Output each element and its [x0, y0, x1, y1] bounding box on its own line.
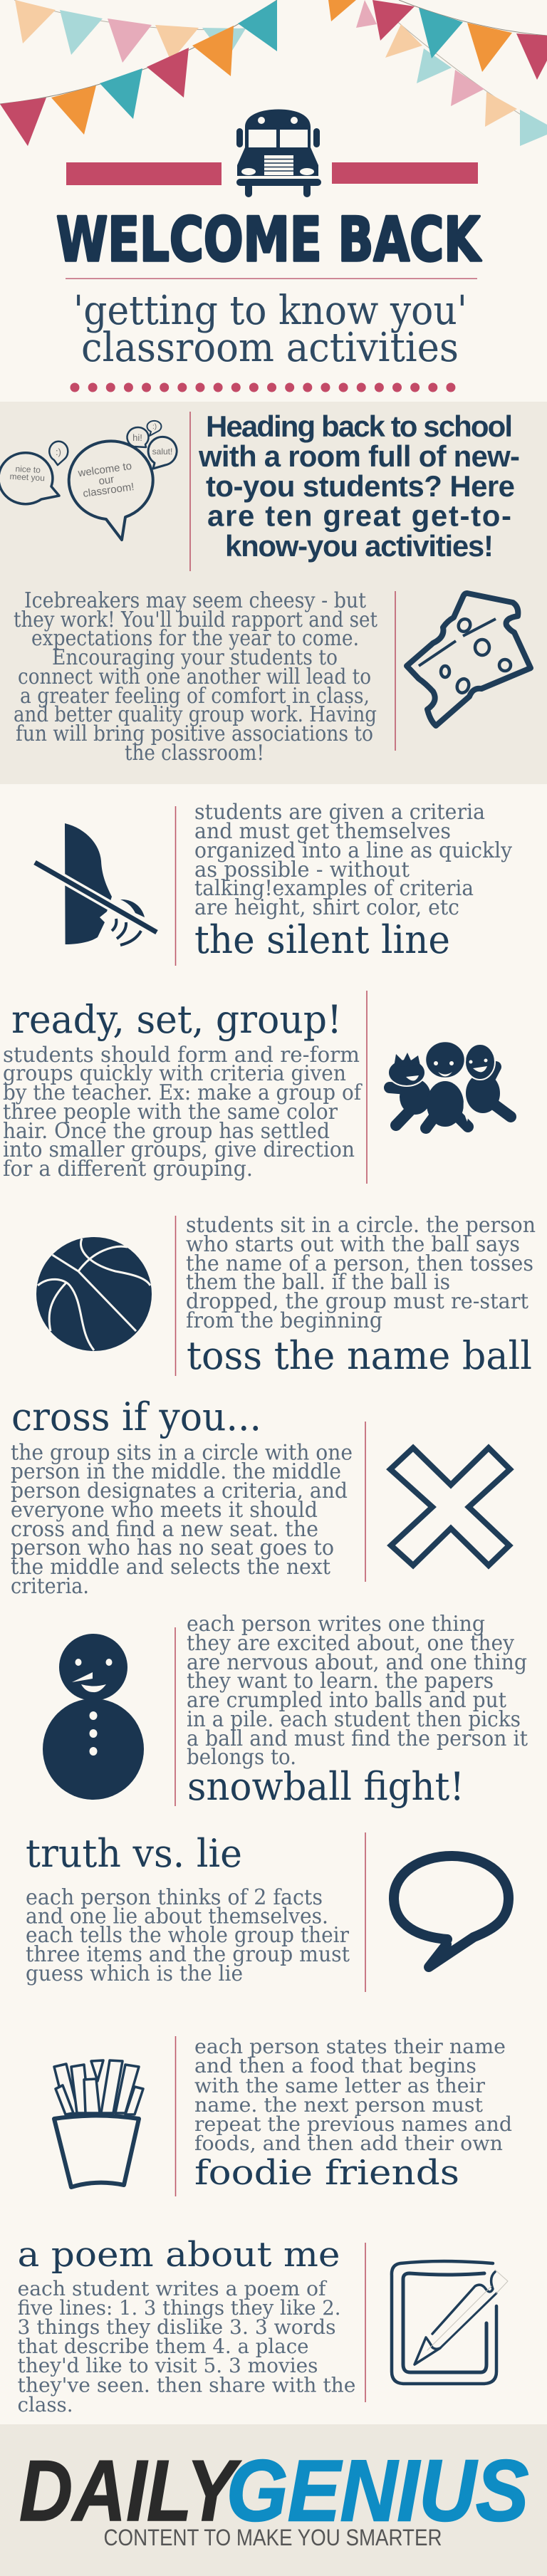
icon: school bus: [236, 110, 321, 197]
intro paragraph: Encouraging your students to: [52, 645, 338, 670]
icon: speech bubbles: nice to: [15, 464, 41, 475]
description: cross if you: the group sits in a circle with one: [11, 1440, 353, 1466]
description: a poem about me: 3 things they dislike 3. 3 words: [17, 2315, 336, 2339]
description: truth vs. lie: and one lie about themselves.: [26, 1904, 328, 1929]
description: toss the name ball: who starts out with the ball says: [186, 1232, 520, 1257]
description: ready, set, group: students should form and re-form: [3, 1043, 360, 1068]
description: foodie friends: repeat the previous names and: [194, 2112, 512, 2136]
description: the silent line: [194, 800, 512, 920]
description: ready, set, group: groups quickly with criteria given: [3, 1061, 346, 1086]
description: the silent line: students are given a criteria: [194, 800, 485, 825]
divider: [174, 1627, 176, 1806]
description: toss the name ball: the name of a person, then tosses: [186, 1251, 533, 1276]
subtitle: [73, 288, 467, 371]
description: snowball fight: [187, 1612, 528, 1770]
description: ready, set, group: by the teacher. Ex: make a group of: [3, 1080, 363, 1105]
panel: truth vs. lie: [26, 1831, 509, 1992]
panel: a poem about me: [17, 2235, 508, 2416]
bunting: top left: [0, 0, 277, 146]
icon: basketball: [36, 1237, 152, 1351]
description: a poem about me: five lines: 1. 3 things they like 2.: [17, 2296, 340, 2320]
description: the silent line: are height, shirt color, etc: [194, 895, 459, 920]
description: foodie friends: with the same letter as their: [194, 2074, 486, 2097]
description: cross if you: criteria.: [11, 1574, 89, 1599]
description: truth vs. lie: each tells the whole group their: [26, 1923, 350, 1948]
description: truth vs. lie: each person thinks of 2 facts: [26, 1885, 323, 1910]
title rule: [66, 278, 477, 279]
description: a poem about me: class.: [17, 2393, 73, 2416]
description: a poem about me: that describe them 4. a place: [17, 2335, 309, 2358]
description: cross if you: [11, 1440, 353, 1599]
description: ready, set, group: into smaller groups, give direction: [3, 1137, 355, 1162]
divider: [365, 2243, 366, 2402]
description: snowball fight: in a pile. each student then picks: [187, 1707, 521, 1732]
panel: cross if you: [11, 1394, 510, 1599]
intro paragraph: the classroom!: [125, 741, 264, 766]
description: ready, set, group: for a different grouping.: [3, 1157, 253, 1182]
panel: snowball fight: [43, 1612, 528, 1809]
intro heading: know-you activities!: [225, 529, 494, 563]
description: the silent line: as possible - without: [194, 857, 410, 882]
intro paragraph: expectations for the year to come.: [31, 626, 359, 651]
intro heading: with a room full of new-: [198, 439, 520, 473]
description: truth vs. lie: three items and the group must: [26, 1942, 350, 1967]
icon: cross: [390, 1448, 510, 1565]
intro paragraph: fun will bring positive associations to: [16, 721, 373, 746]
dotted divider: [75, 383, 469, 392]
description: foodie friends: and then a food that begins: [194, 2054, 476, 2077]
panel: the silent line: [35, 800, 512, 966]
description: the silent line: talking!examples of criteria: [194, 876, 474, 901]
description: the silent line: organized into a line as quickly: [194, 838, 512, 863]
panel: footer: [0, 2424, 547, 2576]
logo: Daily Genius: [19, 2442, 528, 2539]
intro paragraph: and better quality group work. Having: [14, 702, 377, 727]
intro heading: to-you students? Here: [206, 469, 515, 503]
intro heading: Heading back to school: [206, 410, 513, 443]
bunting: top right: [328, 0, 547, 146]
description: toss the name ball: students sit in a circle. the person: [186, 1213, 536, 1238]
heading: snowball fight: snowball fight!: [187, 1764, 464, 1809]
icon: speech bubbles: [0, 421, 177, 540]
description: the silent line: and must get themselves: [194, 819, 451, 844]
intro paragraph: Icebreakers may seem cheesy - but: [24, 588, 366, 613]
panel: foodie friends: [54, 2035, 512, 2196]
divider: [366, 991, 368, 1184]
heading: the silent line: the silent line: [194, 917, 450, 962]
description: snowball fight: a ball and must find the person it: [187, 1726, 528, 1751]
description: ready, set, group: hair. Once the group has settled: [3, 1119, 330, 1144]
description: toss the name ball: dropped, the group must re-start: [186, 1289, 528, 1314]
heading: truth vs. lie: truth vs. lie: [26, 1831, 242, 1876]
icon: speech bubbles: our: [98, 474, 115, 487]
icon: speech bubbles: meet you: [9, 471, 45, 483]
icon: three children: [388, 1041, 511, 1128]
logo: Daily Genius: DAILY: [19, 2442, 241, 2539]
description: cross if you: cross and find a new seat. the: [11, 1517, 318, 1542]
icon: speech bubbles: :): [152, 423, 157, 431]
description: a poem about me: they've seen. then share with the: [17, 2373, 356, 2397]
panel: toss the name ball: [36, 1213, 536, 1378]
description: foodie friends: [194, 2035, 512, 2155]
heading: a poem about me: a poem about me: [17, 2235, 340, 2275]
description: cross if you: the middle and selects the next: [11, 1555, 330, 1580]
description: toss the name ball: them the ball. if the ball is: [186, 1270, 450, 1295]
description: snowball fight: are crumpled into balls and put: [187, 1688, 506, 1713]
description: foodie friends: each person states their name: [194, 2035, 506, 2058]
subtitle: 'getting to know you': [73, 288, 467, 334]
ribbon bar left: [66, 162, 222, 185]
heading: toss the name ball: toss the name ball: [187, 1333, 532, 1378]
description: ready, set, group: [3, 1043, 363, 1182]
divider: [175, 2036, 177, 2196]
icon: silent head: [35, 823, 157, 945]
divider: [175, 806, 177, 966]
heading: foodie friends: foodie friends: [194, 2153, 459, 2193]
description: a poem about me: [17, 2277, 356, 2416]
ribbon bar right: [332, 162, 478, 184]
icon: speech bubbles: welcome to: [77, 460, 132, 479]
description: snowball fight: they are excited about, one they: [187, 1631, 514, 1656]
icon: speech bubbles: hi!: [132, 432, 142, 443]
description: cross if you: person designates a criteria, and: [11, 1479, 348, 1503]
tagline: CONTENT TO MAKE YOU SMARTER: [104, 2525, 442, 2550]
intro heading: [198, 410, 520, 563]
icon: snowman: [43, 1634, 144, 1800]
description: a poem about me: they'd like to visit 5. 3 movies: [17, 2354, 318, 2377]
description: truth vs. lie: guess which is the lie: [26, 1961, 243, 1986]
icon: speech bubbles: :): [56, 447, 61, 457]
description: snowball fight: belongs to.: [187, 1745, 296, 1770]
heading: cross if you: cross if you...: [11, 1394, 261, 1439]
description: cross if you: person who has no seat goes to: [11, 1535, 334, 1560]
intro paragraph: [14, 588, 377, 766]
icon: speech bubble: [394, 1856, 509, 1967]
divider: [175, 1216, 177, 1376]
intro paragraph: a greater feeling of comfort in class,: [20, 684, 370, 709]
icon: speech bubbles: salut!: [152, 447, 172, 457]
description: truth vs. lie: [26, 1885, 350, 1986]
divider: [395, 591, 396, 751]
description: snowball fight: are nervous about, and one thing: [187, 1650, 527, 1675]
icon: speech bubbles: classroom!: [82, 481, 135, 500]
divider: [189, 412, 191, 571]
description: toss the name ball: [186, 1213, 536, 1333]
panel: ready, set, group: [3, 991, 511, 1184]
panel: introduction: [0, 402, 547, 784]
description: snowball fight: each person writes one thing: [187, 1612, 485, 1637]
divider: [365, 1422, 366, 1582]
subtitle: classroom activities: [81, 325, 459, 371]
description: cross if you: everyone who meets it should: [11, 1498, 318, 1523]
description: snowball fight: they want to learn. the papers: [187, 1669, 494, 1694]
description: a poem about me: each student writes a poem of: [17, 2277, 328, 2300]
description: ready, set, group: three people with the same color: [3, 1100, 338, 1125]
intro heading: are ten great get-to-: [207, 499, 511, 533]
icon: fries: [54, 2060, 143, 2187]
divider: [365, 1832, 366, 1992]
icon: cheese: [407, 593, 531, 726]
icon: pencil and paper: [392, 2261, 508, 2384]
description: cross if you: person in the middle. the middle: [11, 1459, 341, 1484]
description: foodie friends: name. the next person must: [194, 2093, 484, 2117]
intro paragraph: connect with one another will lead to: [18, 664, 371, 689]
description: foodie friends: foods, and then add their own: [194, 2132, 503, 2155]
heading: ready, set, group: ready, set, group!: [11, 997, 342, 1042]
description: toss the name ball: from the beginning: [186, 1308, 382, 1333]
intro paragraph: they work! You'll build rapport and set: [14, 608, 377, 632]
